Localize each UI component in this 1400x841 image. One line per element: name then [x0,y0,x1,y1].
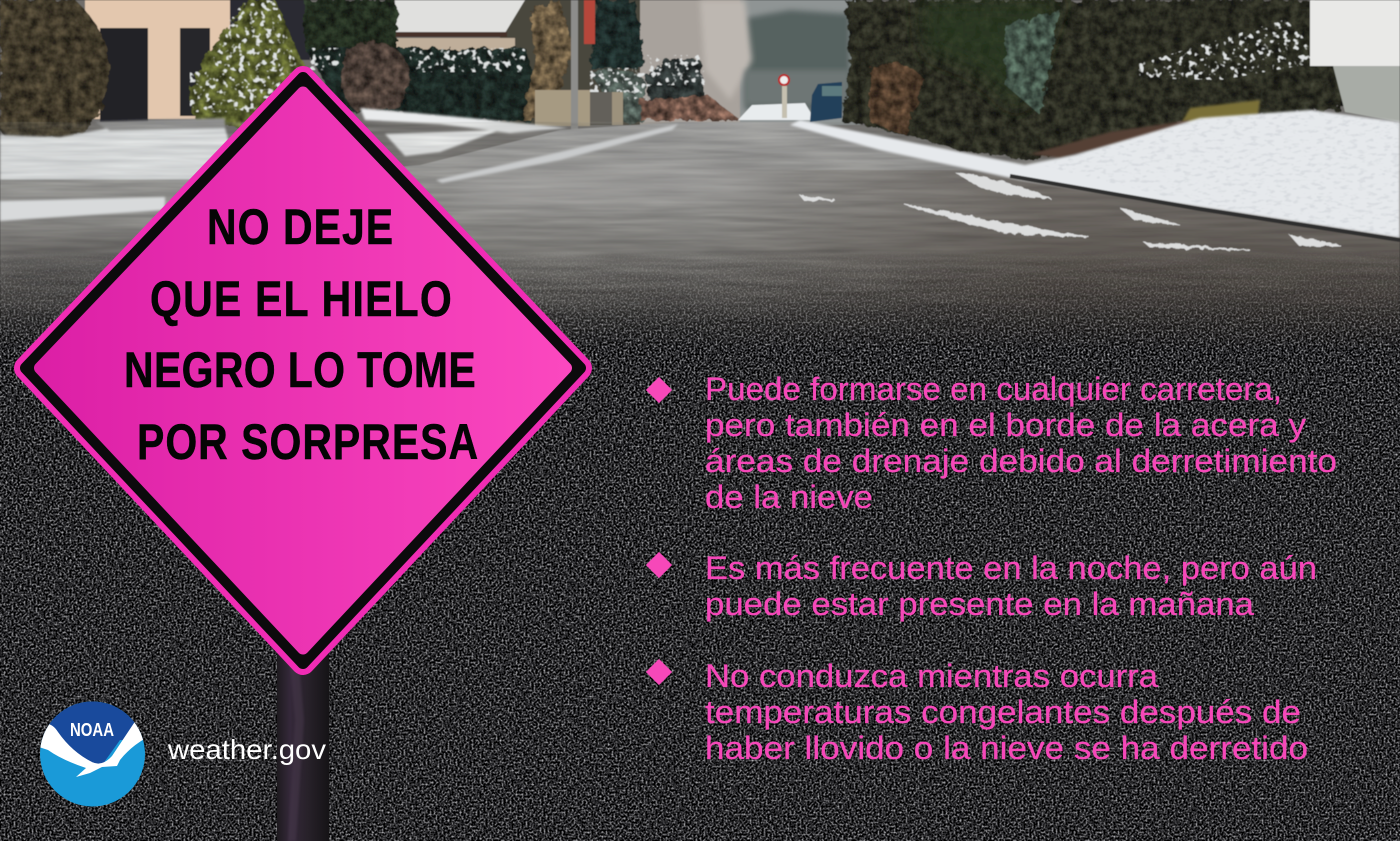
sign message: POR SORPRESA [137,414,478,470]
house and garage [85,0,310,122]
website label: weather.gov [167,734,326,765]
bullet 1: áreas de drenaje debido al derretimiento [705,443,1337,479]
sign inner face [40,92,566,648]
NOAA logo [40,702,145,806]
stone walls, pole and banner [535,0,623,131]
bullet 3 [646,658,1308,766]
bullet 3: haber llovido o la nieve se ha derretido [705,730,1308,766]
bullet list [646,371,1337,766]
sign message: NO DEJE [207,199,393,255]
foggy distant forest [500,0,860,125]
bullet 1: de la nieve [705,479,873,515]
bullet 1: pero también en el borde de la acera y [705,407,1306,443]
sign message: NEGRO LO TOME [124,342,476,398]
right snow bank [790,110,1400,250]
distant snow, car and road sign [738,75,842,122]
roof and back house [305,0,525,52]
right hedge [842,0,1345,160]
icy road surface [0,122,1400,350]
sign black border [26,78,580,663]
bullet 1 [646,371,1337,515]
snowy tree [188,0,305,128]
bullet 2: Es más frecuente en la noche, pero aún [705,550,1317,586]
bullet 3: No conduzca mientras ocurra [705,658,1158,694]
bullet 2 [646,550,1317,622]
left snow banks [0,108,568,180]
sign pink backing [26,78,580,663]
sign pole [277,650,329,841]
white building corner [1310,0,1400,122]
sign message: QUE EL HIELO [150,271,452,327]
asphalt background [0,260,1400,841]
bullet 1: Puede formarse en cualquier carretera, [705,371,1282,407]
NOAA logo: NOAA [70,720,114,740]
sign message [124,199,478,470]
bullet 2: puede estar presente en la mañana [705,586,1254,622]
bullet 3: temperaturas congelantes después de [705,694,1301,730]
warning sign [26,78,580,663]
hedges and bushes [0,0,740,138]
photo: icy residential road [0,0,1400,350]
